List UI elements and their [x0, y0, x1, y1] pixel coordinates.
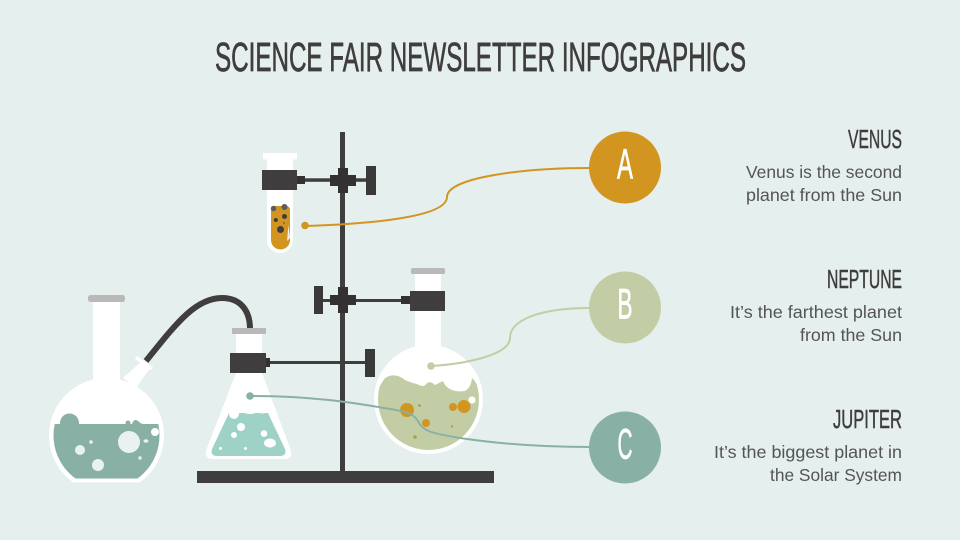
- text block: Venus: Venus is the second: [746, 162, 902, 182]
- test tube with clamp: [262, 153, 376, 253]
- text block: Venus: VENUS: [848, 124, 902, 154]
- round flask left with side arm: [49, 295, 165, 493]
- badge A: [589, 132, 661, 204]
- infographic canvas: [49, 42, 902, 484]
- connector line B: [427, 308, 590, 370]
- badge C: [589, 412, 661, 484]
- connector line A: [301, 168, 590, 229]
- text block: Jupiter: the Solar System: [770, 465, 902, 485]
- text block: Venus: [746, 124, 902, 205]
- text block: Neptune: NEPTUNE: [827, 264, 902, 294]
- text block: Neptune: [730, 264, 902, 345]
- badge B: B: [618, 280, 632, 328]
- text block: Neptune: from the Sun: [800, 325, 902, 345]
- text block: Jupiter: [714, 404, 902, 485]
- text block: Jupiter: It’s the biggest planet in: [714, 442, 902, 462]
- badge A: A: [617, 140, 633, 188]
- badge C: C: [618, 420, 632, 468]
- connecting tube: [146, 298, 250, 361]
- text block: Venus: planet from the Sun: [746, 185, 902, 205]
- text block: Neptune: It’s the farthest planet: [730, 302, 902, 322]
- badge B: [589, 272, 661, 344]
- connector line C: [246, 392, 590, 447]
- round flask right with clamp: [314, 268, 483, 455]
- erlenmeyer flask with clamp: [206, 328, 375, 459]
- lab stand: [197, 132, 494, 483]
- text block: Jupiter: JUPITER: [833, 404, 902, 434]
